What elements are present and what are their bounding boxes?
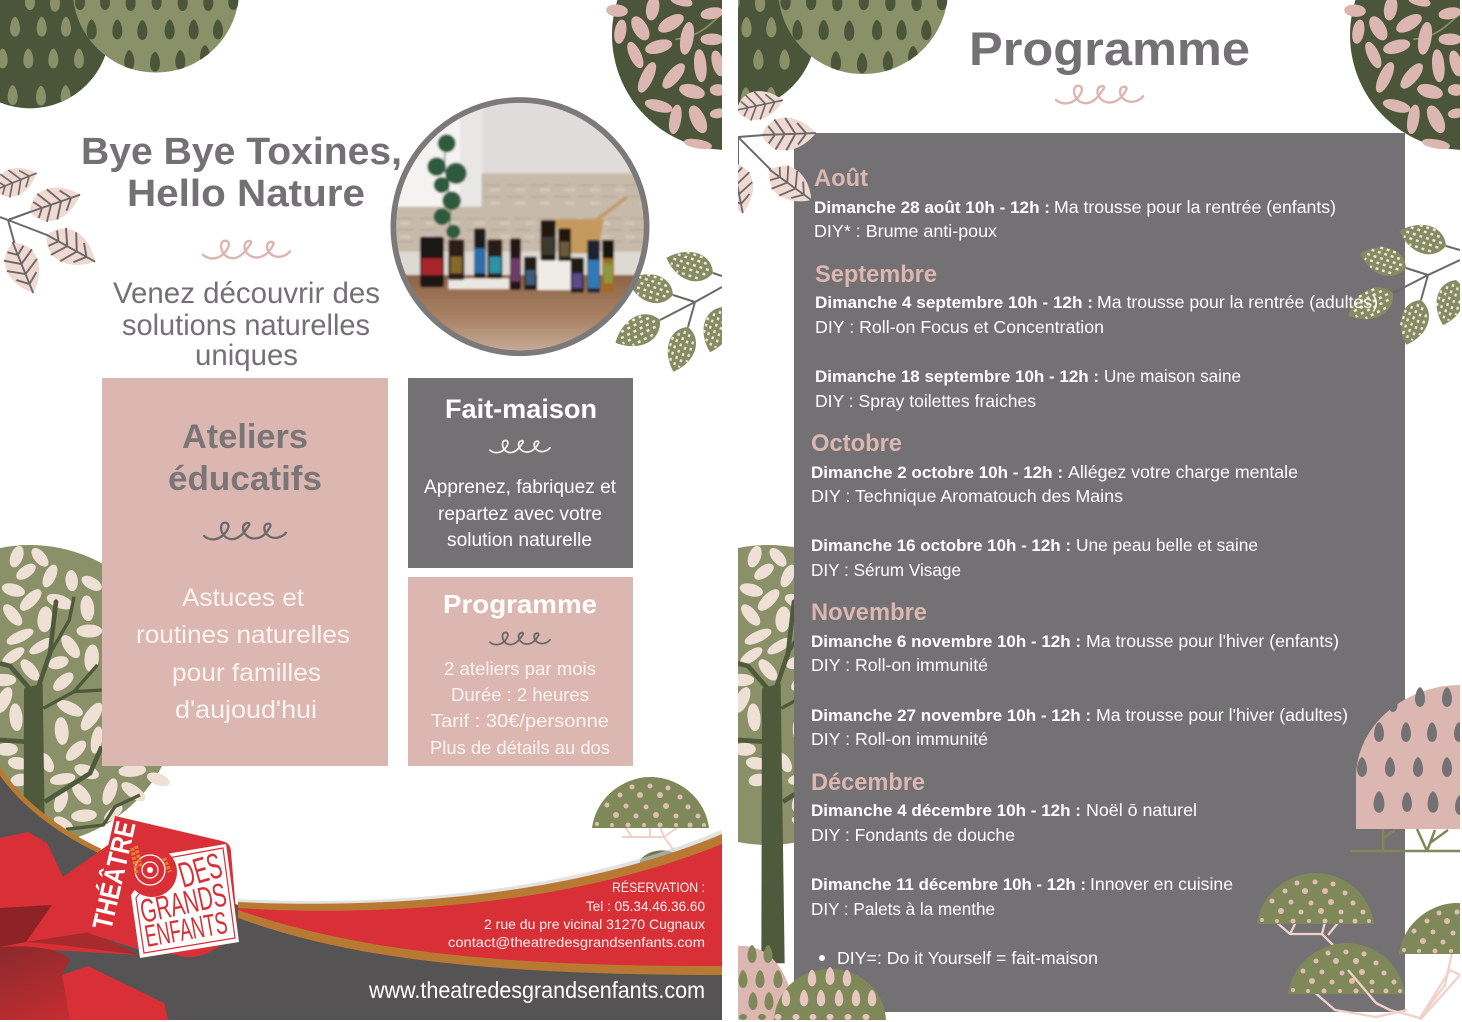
schedule: September: DIY : Spray toilettes fraiches <box>815 391 1036 411</box>
panel text: pour familles <box>172 659 321 687</box>
month: Aout: Août <box>814 165 868 192</box>
schedule: November: DIY : Roll-on immunité <box>811 729 988 749</box>
schedule: September: Dimanche 4 septembre 10h - 12h : <box>815 293 1093 312</box>
panel text <box>136 584 350 724</box>
contact details <box>448 879 705 950</box>
panel text: Astuces et <box>182 584 304 612</box>
programme background panel <box>794 133 1405 1012</box>
page 2: programme <box>738 0 1460 1020</box>
title: Bye Bye Toxines, <box>81 131 402 173</box>
panel text: Apprenez, fabriquez et <box>424 477 617 498</box>
pink squiggle divider <box>203 241 290 258</box>
month: Novembre: Novembre <box>811 599 927 626</box>
contact details: 2 rue du pre vicinal 31270 Cugnaux <box>484 916 705 932</box>
decorative tree: left crown with trunk <box>0 545 170 837</box>
panel heading: Ateliers <box>182 418 308 456</box>
panel: programme <box>408 577 633 766</box>
contact details: RÉSERVATION : <box>612 879 705 895</box>
schedule: October <box>811 462 1298 580</box>
decorative tree: small dome <box>592 777 709 870</box>
decorative trees: olive domes with pink branches <box>1257 873 1462 1020</box>
schedule: October: DIY : Sérum Visage <box>811 560 961 580</box>
website: www.theatredesgrandsenfants.com <box>368 977 705 1003</box>
icon: pink leaf branch <box>738 91 816 214</box>
pink squiggle divider <box>1056 86 1143 103</box>
decorative tree: top right <box>1345 0 1462 150</box>
footer banner: grey, red and ochre swoosh <box>0 768 722 1020</box>
panel text: Durée : 2 heures <box>451 685 589 705</box>
panel: fait-maison <box>408 378 633 568</box>
schedule: November: Dimanche 27 novembre 10h - 12h : <box>811 706 1091 725</box>
schedule: November: DIY : Roll-on immunité <box>811 655 988 675</box>
panel heading: Fait-maison <box>445 394 597 424</box>
schedule: December: Innover en cuisine <box>1090 874 1233 894</box>
squiggle divider <box>490 632 550 645</box>
schedule: December: Dimanche 11 décembre 10h - 12h : <box>811 875 1086 894</box>
schedule: August: Dimanche 28 août 10h - 12h : <box>814 198 1050 217</box>
panel text: 2 ateliers par mois <box>444 659 596 679</box>
logo: Theatre des Grands Enfants: DES <box>174 844 227 896</box>
schedule: August: Ma trousse pour la rentrée (enfants) <box>1054 197 1336 217</box>
icon: olive leaf branch <box>1348 224 1460 345</box>
schedule: October: DIY : Technique Aromatouch des Mains <box>811 486 1123 506</box>
schedule: September: Ma trousse pour la rentrée (adultes) <box>1097 292 1378 312</box>
title <box>84 136 400 206</box>
schedule: December: Noël ō naturel <box>1086 800 1197 820</box>
panel text: Tarif : 30€/personne <box>431 711 609 731</box>
logo: Theatre des Grands Enfants: THÉÂTRE <box>87 818 142 932</box>
panel text: Plus de détails au dos <box>430 738 610 758</box>
schedule: December <box>811 800 1233 919</box>
page 1: atelier flyer front <box>0 0 722 1020</box>
schedule: September: Dimanche 18 septembre 10h - 12h : <box>815 367 1099 386</box>
schedule: September: Une maison saine <box>1104 366 1241 386</box>
photo: essential oil bottles in circle <box>390 97 650 362</box>
icon: pink leaf branch <box>0 168 96 294</box>
schedule: September: DIY : Roll-on Focus et Concentration <box>815 317 1104 337</box>
contact details: contact@theatredesgrandsenfants.com <box>448 934 705 950</box>
subtitle: solutions naturelles <box>122 309 370 342</box>
schedule: December: Dimanche 4 décembre 10h - 12h : <box>811 801 1081 820</box>
schedule: August <box>814 197 1336 241</box>
schedule: September <box>815 292 1378 411</box>
decorative tree: top left <box>653 0 948 111</box>
title: Programme <box>969 22 1250 75</box>
logo: Theatre des Grands Enfants <box>87 816 239 958</box>
panel text: repartez avec votre <box>438 504 602 525</box>
panel text: d'aujoud'hui <box>175 696 317 724</box>
squiggle divider <box>204 523 286 539</box>
logo: Theatre des Grands Enfants: GRANDS <box>137 876 230 930</box>
subtitle: uniques <box>195 339 298 372</box>
logo: Theatre des Grands Enfants: ENFANTS <box>142 905 230 954</box>
panel text: solution naturelle <box>447 530 592 551</box>
footnote: DIY=: Do it Yourself = fait-maison <box>837 948 1098 968</box>
schedule: August: DIY* : Brume anti-poux <box>814 221 997 241</box>
decorative tree: pink dome <box>1350 685 1462 851</box>
schedule: October: Une peau belle et saine <box>1076 535 1258 555</box>
subtitle <box>113 277 380 372</box>
panel heading <box>169 423 321 490</box>
panel heading: éducatifs <box>168 460 322 498</box>
month: Septembre: Septembre <box>815 261 937 288</box>
schedule: October: Dimanche 16 octobre 10h - 12h : <box>811 536 1071 555</box>
squiggle divider <box>490 440 550 453</box>
red ribbon <box>0 832 168 1020</box>
decorative tree: left crown with trunk <box>738 545 794 964</box>
icon: olive leaf branch <box>616 251 722 372</box>
decorative tree: bottom left pink <box>738 945 789 1020</box>
decorative tree: top left <box>0 0 239 108</box>
schedule: December: DIY : Palets à la menthe <box>811 899 995 919</box>
schedule: November: Ma trousse pour l'hiver (enfants) <box>1086 631 1339 651</box>
schedule: October: Allégez votre charge mentale <box>1068 462 1298 482</box>
panel heading: Programme <box>443 589 597 619</box>
panel text <box>430 659 610 758</box>
decorative tree: top right <box>606 0 722 150</box>
schedule: November: Dimanche 6 novembre 10h - 12h : <box>811 632 1081 651</box>
contact details: Tel : 05.34.46.36.60 <box>586 898 705 914</box>
panel text: routines naturelles <box>136 621 350 649</box>
schedule: November <box>811 631 1348 749</box>
month: Octobre: Octobre <box>811 430 902 457</box>
decorative tree: bottom left olive <box>774 967 886 1020</box>
panel: ateliers educatifs <box>102 378 388 766</box>
schedule: November: Ma trousse pour l'hiver (adultes) <box>1096 705 1348 725</box>
schedule: October: Dimanche 2 octobre 10h - 12h : <box>811 463 1063 482</box>
month: Decembre: Décembre <box>811 769 925 796</box>
panel text <box>424 477 617 551</box>
schedule: December: DIY : Fondants de douche <box>811 825 1015 845</box>
title: Hello Nature <box>127 173 365 215</box>
subtitle: Venez découvrir des <box>113 277 380 310</box>
